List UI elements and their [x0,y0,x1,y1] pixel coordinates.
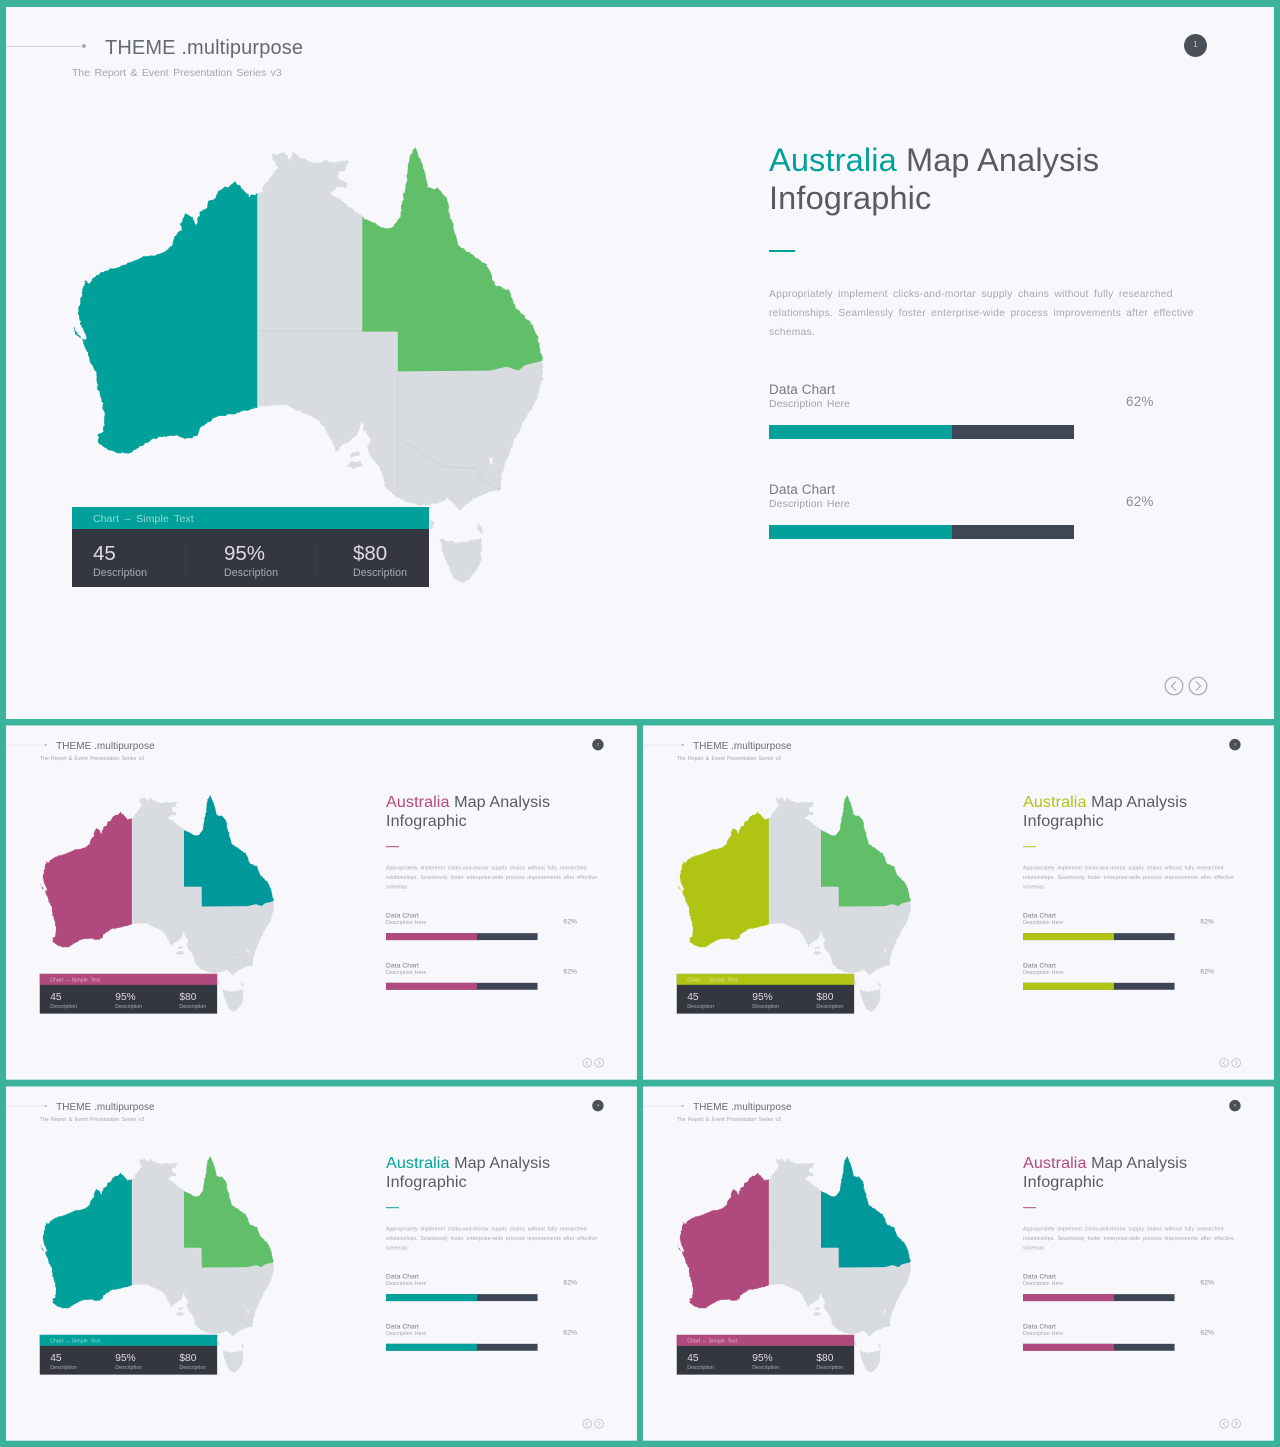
page number badge: 2 [597,742,599,746]
right column: Infographic [386,811,467,829]
data chart 2: 62% [1200,1328,1214,1336]
right column: schemas. [386,1245,409,1251]
data chart 1 [386,1273,577,1302]
data chart 2: Description Here [386,1330,426,1336]
stats table: 95% [115,1352,136,1364]
right column [386,793,597,990]
data chart 2: Data Chart [386,961,419,969]
panel: slide 3 lime [643,726,1274,1080]
right column [386,1154,597,1351]
right column: Australia Map Analysis [1023,793,1187,810]
data chart 1: 62% [563,1279,577,1286]
page number badge [1229,739,1241,750]
header [7,1101,155,1122]
right column: Australia Map Analysis [769,142,1099,178]
data chart 1: Description Here [386,1281,426,1287]
data chart 2: 62% [1126,494,1154,509]
data chart 1 [1023,912,1214,940]
right column: Infographic [386,1172,467,1190]
stats table: Description [179,1365,206,1371]
map of Australia [40,794,274,1012]
right column: Appropriately implement clicks-and-mortar supply chains without fully researched [386,1227,587,1232]
stats table: Description [752,1365,779,1371]
right column: Infographic [1023,811,1104,829]
stats table: Chart – Simple Text [687,977,737,983]
right column: relationships. Seamlessly foster enterprise-wide process improvements after effective [386,1236,597,1241]
data chart 2: Data Chart [1023,1322,1056,1330]
right column [769,142,1194,539]
header: THEME .multipurpose [693,1101,792,1112]
data chart 1: Data Chart [1023,1273,1056,1280]
stats table: Description [50,1004,77,1010]
panel: slide 4 teal [6,1086,637,1441]
right column: relationships. Seamlessly foster enterprise-wide process improvements after effective [1023,875,1234,880]
right column: Australia Map Analysis [1023,1154,1187,1171]
page number badge [592,1100,604,1111]
data chart 2 [1023,1322,1214,1351]
header [644,1101,792,1122]
header [7,740,155,761]
data chart 2: Data Chart [769,482,835,497]
stats table: 45 [50,991,62,1003]
stats table: 95% [115,991,136,1003]
stats table: 45 [687,1352,699,1364]
page number badge: 1 [1193,40,1198,49]
navigation arrows [582,1419,604,1428]
right column [1023,793,1234,990]
data chart 1: Data Chart [769,382,835,397]
data chart 1: Data Chart [1023,912,1056,919]
data chart 2: 62% [1200,967,1214,975]
stats table: 95% [224,542,265,565]
header [6,37,303,79]
stats table: Description [115,1004,142,1010]
right column: relationships. Seamlessly foster enterprise-wide process improvements after effective [1023,1236,1234,1241]
stats table: Chart – Simple Text [50,977,100,983]
data chart 1: Data Chart [386,1273,419,1280]
map of Australia [677,794,912,1012]
stats table: 45 [687,991,699,1003]
page number badge [1184,34,1207,57]
right column: schemas. [769,327,815,338]
data chart 2 [1023,961,1214,990]
stats table: Description [179,1004,206,1010]
data chart 1: Description Here [1023,920,1063,926]
stats table: 95% [752,991,773,1003]
right column: schemas. [1023,1245,1046,1251]
header: The Report & Event Presentation Series v3 [40,755,144,761]
data chart 2 [386,961,577,990]
data chart 1: 62% [1200,918,1214,925]
stats table: $80 [179,1352,196,1364]
navigation arrows [582,1058,604,1068]
data chart 1: Description Here [386,920,426,926]
header: The Report & Event Presentation Series v3 [72,67,282,79]
stats table: Description [752,1004,779,1010]
stats table: Chart – Simple Text [687,1338,737,1344]
header: THEME .multipurpose [693,740,792,751]
stats table: Description [353,567,407,579]
header: THEME .multipurpose [105,37,303,59]
right column: relationships. Seamlessly foster enterprise-wide process improvements after effective [386,875,597,880]
data chart 1 [1023,1273,1214,1302]
page number badge [1229,1100,1241,1111]
data chart 2: Description Here [386,969,426,975]
stats table: Description [93,567,147,579]
stats table: $80 [353,542,387,565]
header: THEME .multipurpose [56,1101,155,1112]
right column: Infographic [769,180,931,216]
panel: main slide [6,7,1274,719]
data chart 1: Data Chart [386,912,419,919]
panel: slide 2 magenta [6,726,637,1080]
data chart 1: Description Here [769,398,850,410]
data chart 1: 62% [1200,1279,1214,1286]
header: The Report & Event Presentation Series v3 [40,1116,144,1122]
stats table [677,974,854,1014]
right column: Australia Map Analysis [386,793,550,810]
stats table: Description [687,1365,714,1371]
data chart 1: Description Here [1023,1281,1063,1287]
data chart 2: Description Here [769,498,850,510]
right column: Appropriately implement clicks-and-mortar supply chains without fully researched [1023,866,1224,871]
stats table: $80 [179,991,196,1003]
stats table [72,507,429,587]
page number badge: 3 [1234,742,1236,746]
navigation arrows [1164,676,1208,696]
data chart 1 [769,382,1154,439]
stats table: Chart – Simple Text [93,513,194,525]
stats table: Description [115,1365,142,1371]
header: THEME .multipurpose [56,740,155,751]
header: The Report & Event Presentation Series v3 [677,1116,781,1122]
data chart 1: 62% [563,918,577,925]
right column: Appropriately implement clicks-and-mortar supply chains without fully researched [386,866,587,871]
stats table: 95% [752,1352,773,1364]
header: The Report & Event Presentation Series v3 [677,755,781,761]
data chart 2 [386,1322,577,1351]
data chart 2: 62% [563,1328,577,1336]
stats table [40,1335,217,1375]
stats table: Description [816,1004,843,1010]
navigation arrows [1220,1419,1241,1428]
right column: Appropriately implement clicks-and-mortar supply chains without fully researched [1023,1227,1224,1232]
right column: schemas. [386,884,409,890]
page number badge [592,739,604,750]
data chart 1: 62% [1126,394,1154,409]
right column: relationships. Seamlessly foster enterprise-wide process improvements after effective [769,308,1194,319]
data chart 2: Data Chart [386,1322,419,1330]
page number badge: 5 [1234,1103,1236,1107]
data chart 2: Description Here [1023,1330,1063,1336]
right column: Australia Map Analysis [386,1154,550,1171]
data chart 2: Data Chart [1023,961,1056,969]
panel: slide 5 magenta [643,1086,1274,1441]
data chart 2 [769,482,1154,539]
stats table: Chart – Simple Text [50,1338,100,1344]
stats table: 45 [93,542,116,565]
stats table: Description [224,567,278,579]
map of Australia [74,146,544,584]
stats table: Description [816,1365,843,1371]
stats table: $80 [816,1352,833,1364]
stats table: Description [687,1004,714,1010]
stats table [677,1335,854,1375]
map of Australia [40,1156,274,1373]
header [644,740,792,761]
right column: schemas. [1023,884,1046,890]
data chart 2: Description Here [1023,969,1063,975]
data chart 1 [386,912,577,940]
right column: Infographic [1023,1172,1104,1190]
stats table: $80 [816,991,833,1003]
right column [1023,1154,1234,1351]
stats table: 45 [50,1352,62,1364]
stats table [40,974,217,1014]
data chart 2: 62% [563,967,577,975]
page number badge: 4 [597,1103,599,1107]
stats table: Description [50,1365,77,1371]
map of Australia [677,1156,912,1373]
right column: Appropriately implement clicks-and-mortar supply chains without fully researched [769,289,1173,300]
navigation arrows [1220,1058,1241,1068]
